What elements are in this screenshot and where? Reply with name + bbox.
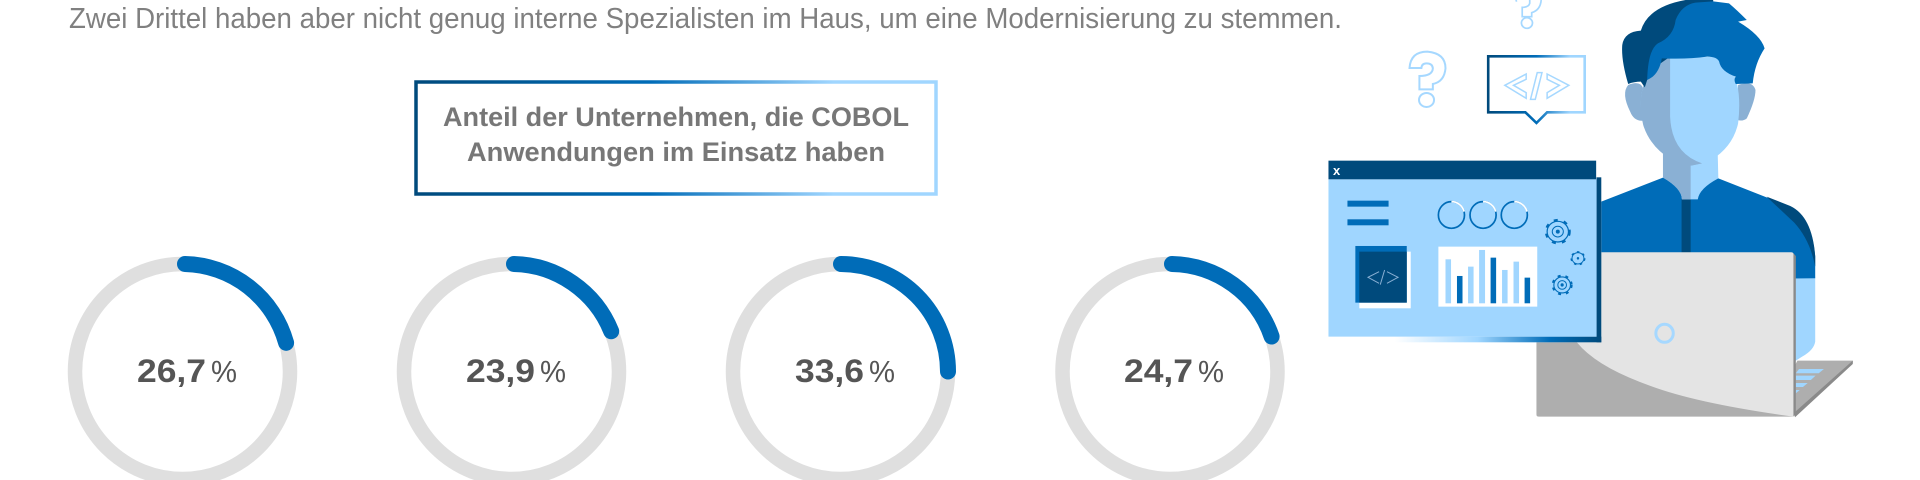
heading box: [416, 82, 936, 194]
donut: 24,7 %: %: [1198, 354, 1224, 389]
donut: 26,7 %: 26,7: [137, 353, 206, 389]
donut: 24,7 %: [1062, 264, 1278, 479]
heading box: Anwendungen im Einsatz haben: [467, 137, 885, 167]
person arm and torso: [1601, 178, 1815, 367]
donut: 23,9 %: [404, 264, 619, 479]
icon: question mark left: [1410, 52, 1446, 107]
donut: 33,6 %: 33,6: [795, 353, 864, 389]
donut: 23,9 %: %: [540, 354, 566, 389]
menu lines: [1347, 201, 1389, 225]
illustration: developer with laptop and window: [1328, 0, 1853, 417]
hair: [1622, 0, 1765, 87]
donut: 33,6 %: %: [869, 354, 895, 389]
donut: 23,9 %: 23,9: [466, 353, 535, 389]
laptop lid: [1536, 252, 1796, 417]
progress rings: [1438, 202, 1527, 228]
window title bar: [1328, 161, 1596, 179]
laptop keyboard deck: [1794, 361, 1853, 417]
heading box: Anteil der Unternehmen, die COBOL: [443, 102, 909, 132]
gear icons: [1546, 220, 1585, 294]
neck: [1663, 147, 1718, 199]
donut: 26,7 %: [75, 264, 290, 479]
donut: 33,6 %: [733, 264, 948, 479]
code tile: [1355, 246, 1411, 308]
intro sentence: Zwei Drittel haben aber nicht genug interne Spezialisten im Haus, um eine Modernisierung zu stemmen.: [69, 3, 1342, 35]
face: [1641, 57, 1739, 166]
donut: 24,7 %: 24,7: [1124, 353, 1193, 389]
speech bubble with code tag: [1488, 56, 1585, 123]
icon: question mark top: [1516, 0, 1541, 28]
bar chart: [1438, 247, 1537, 307]
application window: [1328, 161, 1601, 342]
donut: 26,7 %: %: [211, 354, 237, 389]
window close mark: x: [1333, 163, 1341, 178]
ears: [1625, 83, 1756, 121]
